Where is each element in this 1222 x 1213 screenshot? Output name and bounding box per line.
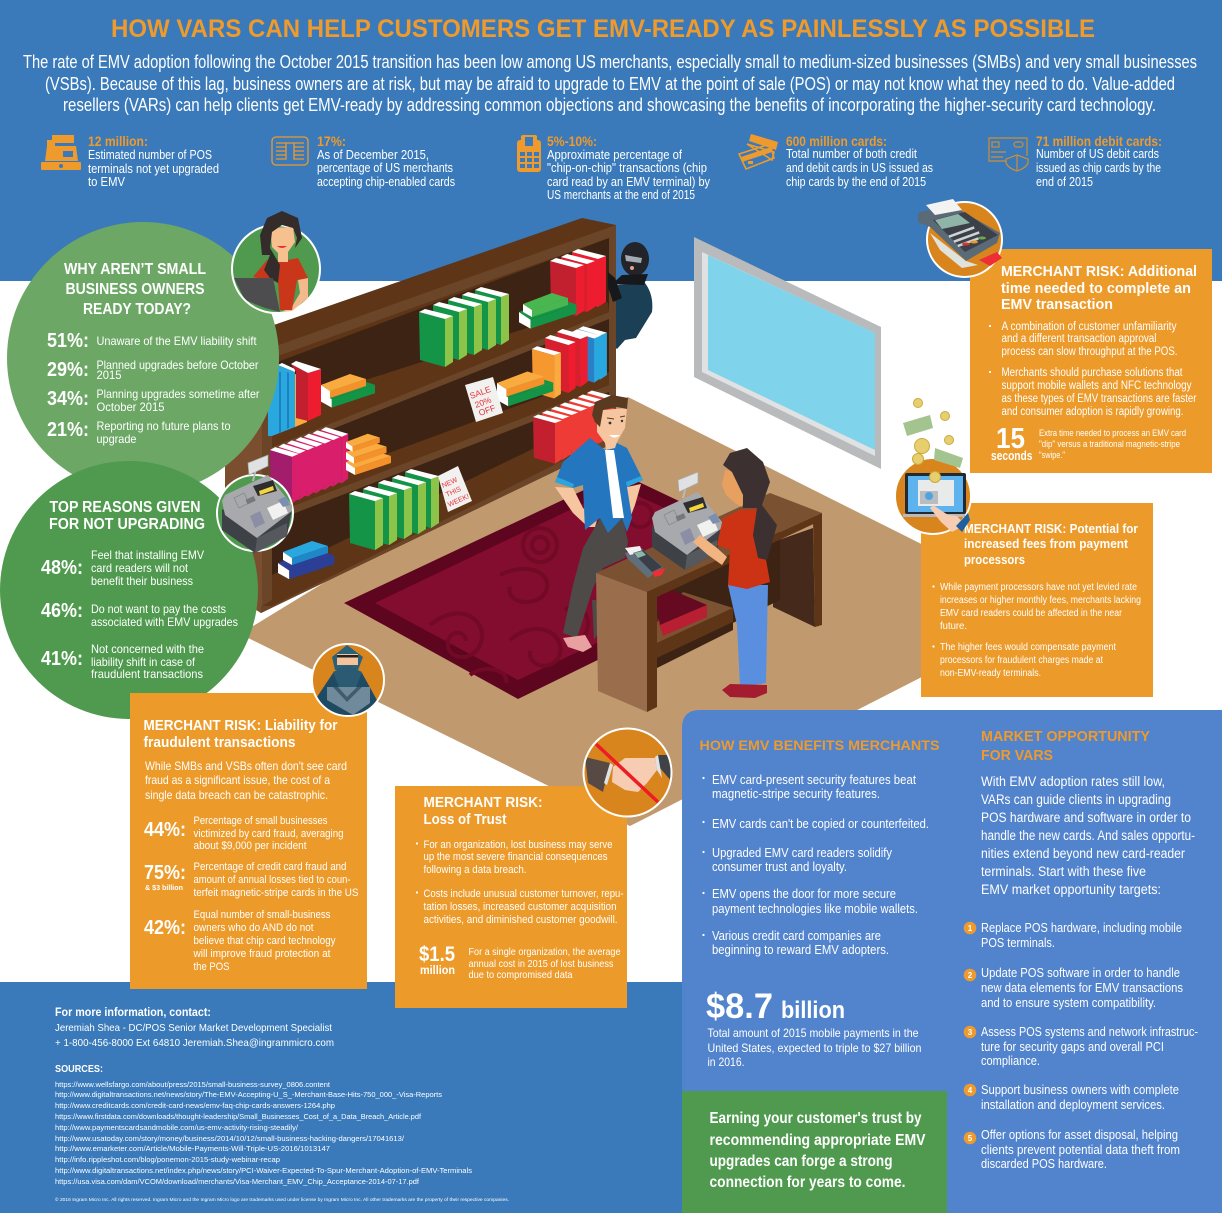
heading: MERCHANT RISK: Liability for [144, 717, 338, 734]
market opportunity intro: EMV market opportunity targets: [981, 882, 1161, 897]
sources list: http://info.rippleshot.com/blog/ponemon-2015-study-webinar-recap [55, 1155, 280, 1164]
circle: why aren't small business owners ready [7, 222, 279, 494]
panel: merchant risk loss of trust [395, 786, 627, 1008]
contact information: For more information, contact: [55, 1007, 211, 1019]
descriptions: Feel that installing EMV [91, 548, 204, 562]
title: HOW VARS CAN HELP CUSTOMERS GET EMV-READY AS PAINLESSLY AS POSSIBLE [111, 15, 1095, 43]
stat description: "dip" versus a traditional magnetic-stripe [1039, 439, 1180, 450]
heading: MERCHANT RISK: Additional [1001, 263, 1197, 280]
man t-shirt [605, 450, 624, 518]
bullet text: While payment processors have not yet levied rate [940, 582, 1137, 593]
descriptions: 2015 [96, 368, 122, 382]
icon: card terminal keypad [517, 135, 541, 172]
icon: hacker [312, 644, 384, 716]
bullets [932, 585, 935, 648]
market opportunity targets: Replace POS hardware, including mobile [981, 921, 1182, 935]
market opportunity targets [981, 921, 1198, 1171]
percentages: 42%: [144, 917, 186, 939]
bullet text: Costs include unusual customer turnover, repu- [424, 888, 624, 900]
woman jeans [728, 585, 768, 687]
illustration: burglar body behind shelf [612, 242, 652, 349]
descriptions: Unaware of the EMV liability shift [96, 334, 257, 348]
stat: $8.7 billion: billion [781, 997, 845, 1024]
woman head [722, 470, 743, 507]
heading: market opportunity for VARs: FOR VARS [981, 747, 1053, 764]
descriptions: fraudulent transactions [91, 667, 203, 681]
stat: 12 million POS terminals: Estimated number of POS [88, 147, 212, 162]
stat description [1039, 428, 1186, 461]
icon: cash register [217, 455, 293, 553]
counter interior [647, 530, 780, 660]
stat: 15 seconds: 15 [996, 423, 1025, 455]
percentages: & $3 billion [145, 883, 183, 892]
descriptions: Do not want to pay the costs [91, 602, 226, 616]
counter top [596, 493, 822, 592]
man legs [563, 518, 628, 638]
market opportunity intro: POS hardware and software in order to [981, 810, 1191, 825]
sources list: http://www.usatoday.com/story/money/business/2014/10/12/small-business-hacking-dangers/17041613/ [55, 1134, 405, 1143]
market opportunity intro: With EMV adoption rates still low, [981, 774, 1165, 789]
stat: 5%-10% chip-on-chip transactions [517, 134, 710, 202]
stat: 5%-10% chip-on-chip transactions: 5%-10%: [547, 134, 597, 149]
stat description: annual cost in 2015 of lost business [468, 958, 614, 970]
stat: 15 seconds [991, 423, 1032, 463]
market opportunity targets: compliance. [981, 1054, 1040, 1068]
market opportunity targets: discarded POS hardware. [981, 1157, 1107, 1171]
illustration: cashier woman [693, 448, 777, 698]
books: middle row flat stack [497, 371, 553, 406]
stat: 71 million debit cards: end of 2015 [1036, 174, 1093, 189]
stat: $1.5 million: $1.5 [419, 943, 455, 966]
benefits list: EMV card-present security features beat [712, 773, 916, 787]
shelf interior [272, 238, 609, 600]
stat: 17% merchants accepting chip cards: 17%: [317, 134, 346, 149]
shelf bottom board [272, 412, 609, 606]
books: bottom row red [533, 390, 614, 464]
stat description: due to compromised data [468, 969, 573, 981]
percentages [47, 330, 89, 441]
percentages: 41%: [41, 648, 83, 670]
panel: merchant risk additional time [970, 249, 1212, 473]
numbered badges: 5 [968, 1134, 973, 1143]
bullet text: For an organization, lost business may serve [424, 839, 612, 851]
bullet text: and consumer adoption is rapidly growing. [1002, 406, 1184, 418]
percentages [144, 819, 186, 939]
heading: WHY AREN’T SMALL [64, 261, 206, 278]
stat: 12 million POS terminals: terminals not yet upgraded [88, 161, 219, 176]
percentages: 44%: [144, 819, 186, 841]
descriptions: liability shift in case of [91, 655, 196, 669]
bullets [416, 842, 418, 894]
stat: 600 million cards: Total number of both credit [786, 146, 917, 161]
heading: market opportunity for VARs: MARKET OPPORTUNITY [981, 728, 1150, 745]
sign: new this week [438, 466, 472, 512]
panel: merchant risk potential fees [921, 503, 1153, 697]
icon: card terminal [918, 199, 1002, 277]
stat: 600 million cards: and debit cards in US issued as [786, 160, 933, 175]
sources list: http://www.paymentscardsandmobile.com/us-emv-activity-rising-steadily/ [55, 1123, 299, 1132]
heading [1001, 263, 1197, 313]
sign: sale 20% off: OFF [477, 403, 497, 418]
stat descriptions: believe that chip card technology [194, 935, 336, 947]
stat description: For a single organization, the average [468, 946, 621, 958]
store floor [240, 397, 1053, 826]
percentages: 34%: [47, 388, 89, 410]
circle: top reasons for not upgrading [0, 461, 258, 719]
stat descriptions: about $9,000 per incident [194, 840, 306, 852]
stat description: United States, expected to triple to $27 billion [708, 1041, 922, 1055]
sign: sale 20% off: 20% [473, 395, 493, 410]
woman's arm [282, 278, 308, 312]
bullet text: A combination of customer unfamiliarity [1002, 321, 1177, 333]
books: left row blue, orange and red [268, 361, 321, 436]
descriptions: Not concerned with the [91, 642, 204, 656]
bullet text: tation losses, increased customer acquisition [424, 901, 616, 913]
panel: merchant risk liability [130, 693, 367, 989]
sources list: http://www.digitaltransactions.net/news/story/The-EMV-Accepting-U_S_-Merchant-Base-Hits-750_000_-Visa-Reports [55, 1090, 442, 1099]
intro text [145, 759, 347, 802]
woman's smile [277, 246, 287, 248]
stat: 5%-10% chip-on-chip transactions: US merchants at the end of 2015 [547, 187, 695, 202]
panel: blue benefits and market opportunity [682, 710, 1222, 1213]
shelf top lip [262, 225, 616, 606]
heading: time needed to complete an [1001, 280, 1191, 297]
market opportunity targets: POS terminals. [981, 936, 1055, 950]
laptop [234, 278, 280, 312]
bullet text: following a data breach. [424, 864, 526, 876]
books: top row flat stack [519, 293, 577, 329]
heading: MERCHANT RISK: [424, 795, 542, 811]
percentages: 75%: [144, 862, 186, 884]
bullet text: up the most severe financial consequences [424, 851, 608, 863]
illustration: bookshelf [225, 218, 616, 613]
stat descriptions: Equal number of small-business [194, 909, 331, 921]
tray [655, 590, 707, 625]
intro text: single data breach can be catastrophic. [145, 788, 328, 802]
contact information: Jeremiah Shea - DC/POS Senior Market Development Specialist [55, 1022, 332, 1034]
woman shoes [722, 684, 767, 698]
market opportunity targets: Update POS software in order to handle [981, 966, 1180, 980]
market opportunity targets: clients prevent potential data theft from [981, 1143, 1180, 1157]
sources list: http://www.creditcards.com/credit-card-news/emv-faq-chip-cards-answers-1264.php [55, 1101, 335, 1110]
stat descriptions: victimized by card fraud, averaging [194, 828, 344, 840]
bills [903, 415, 933, 436]
stat: 17% merchants accepting chip cards: accepting chip-enabled cards [317, 174, 455, 189]
heading: market opportunity for VARs [981, 728, 1150, 764]
coins [912, 398, 954, 482]
heading: fraudulent transactions [144, 734, 296, 751]
woman's neck and face [270, 227, 295, 262]
man head [597, 408, 627, 450]
numbered badges: 1 [968, 924, 973, 933]
bullet text: increases or higher monthly fees, merchants lacking [940, 595, 1141, 606]
descriptions: card readers will not [91, 561, 189, 575]
heading: TOP REASONS GIVEN [50, 499, 200, 516]
shelf frame [225, 218, 616, 613]
market opportunity intro: terminals. Start with these five [981, 864, 1146, 879]
bullet text: and a different transaction approval [1002, 333, 1156, 345]
shelf board 2 [272, 372, 609, 514]
heading: increased fees from payment [964, 537, 1129, 551]
heading: BUSINESS OWNERS [66, 281, 204, 298]
bullet text: Merchants should purchase solutions that [1002, 367, 1183, 379]
descriptions: Planning upgrades sometime after [96, 387, 260, 401]
descriptions: October 2015 [96, 400, 165, 414]
sign: new this week: NEW [441, 477, 459, 490]
stat: 71 million debit cards [989, 134, 1162, 189]
heading: READY TODAY? [83, 301, 191, 318]
stat: 600 million cards [739, 134, 933, 189]
contact information [55, 1007, 334, 1049]
icon: card and shield [989, 138, 1028, 171]
descriptions [91, 548, 238, 681]
illustration: card terminal on counter [625, 546, 665, 578]
woman hair [723, 448, 777, 560]
benefits list: consumer trust and loyalty. [712, 860, 847, 874]
heading [144, 717, 338, 751]
books: pink set [270, 427, 348, 503]
stat: $1.5 million: million [420, 963, 455, 977]
intro paragraph [23, 52, 1197, 115]
callout: earning trust: Earning your customer's trust by [710, 1110, 922, 1127]
market opportunity intro [981, 774, 1195, 897]
percentages: 51%: [47, 330, 89, 352]
benefits list: magnetic-stripe security features. [712, 787, 880, 801]
counter right end panel [773, 528, 815, 627]
market opportunity targets: ture for security gaps and overall PCI [981, 1040, 1164, 1054]
heading: EMV transaction [1001, 296, 1113, 313]
stat: 600 million cards: chip cards by the end of 2015 [786, 174, 926, 189]
stat: $8.7 billion: $8.7 [706, 987, 773, 1026]
illustration: window [694, 237, 881, 469]
sign: new this week: WEEK! [447, 493, 470, 509]
descriptions [96, 334, 260, 446]
bullet text [424, 839, 624, 926]
bullet text: The higher fees would compensate payment [940, 642, 1116, 653]
market opportunity targets: new data elements for EMV transactions [981, 981, 1183, 995]
bullet text: support mobile wallets and NFC technology [1002, 380, 1192, 392]
stat: 71 million debit cards: issued as chip cards by the [1036, 160, 1161, 175]
icon: broken handshake [584, 728, 672, 816]
numbered badges: 3 [968, 1028, 973, 1037]
woman's shirt [253, 258, 308, 310]
books: top row green [419, 287, 509, 367]
stat description: Extra time needed to process an EMV card [1039, 428, 1186, 439]
stat: 17% merchants accepting chip cards: percentage of US merchants [317, 160, 453, 175]
background: top blue band [0, 0, 1222, 281]
market opportunity targets: installation and deployment services. [981, 1098, 1165, 1112]
percentages: 48%: [41, 557, 83, 579]
illustration: customer man [555, 395, 643, 652]
man shoes [563, 635, 592, 652]
market opportunity intro: VARs can guide clients in upgrading [981, 792, 1171, 807]
heading [964, 522, 1138, 567]
stat: 17% merchants accepting chip cards [272, 134, 455, 189]
sources list: https://usa.visa.com/dam/VCOM/download/merchants/Visa-Merchant_EMV_Chip_Acceptance-2014-07-17.pdf [55, 1177, 420, 1186]
benefits list: beginning to reward EMV adopters. [712, 943, 889, 957]
bullet dots [702, 777, 705, 936]
stat: $8.7 billion [706, 987, 845, 1026]
stat description [468, 946, 621, 981]
sources list: http://www.emarketer.com/Article/Mobile-Payments-Will-Triple-US-2016/1013147 [55, 1144, 330, 1153]
callout: earning trust [682, 1091, 947, 1213]
books: bottom left flat stack [278, 541, 334, 579]
market opportunity targets: Offer options for asset disposal, helping [981, 1128, 1178, 1142]
benefits list: payment technologies like mobile wallets. [712, 902, 918, 916]
bullet text [940, 582, 1141, 679]
callout: earning trust: recommending appropriate EMV [710, 1132, 926, 1149]
percentages: 21%: [47, 419, 89, 441]
illustration: rug [344, 473, 700, 699]
background: bottom blue band [0, 982, 1222, 1213]
descriptions: benefit their business [91, 574, 193, 588]
illustration: counter [596, 493, 822, 712]
descriptions: Planned upgrades before October [96, 358, 258, 372]
numbered badges [964, 922, 976, 1144]
man face [607, 416, 625, 438]
woman top [717, 509, 770, 589]
shelf board 1 [272, 302, 609, 447]
bullet text: EMV card readers could be affected in the near [940, 608, 1123, 619]
stat: 12 million POS terminals: 12 million: [88, 134, 148, 149]
sign: sale 20% off: SALE [468, 384, 492, 401]
books: left row flat stack [321, 374, 375, 408]
books: bottom row green [349, 469, 439, 550]
stat: $1.5 million [419, 943, 455, 977]
bullet text [1002, 321, 1197, 418]
sources list: https://www.wellsfargo.com/about/press/2015/small-business-survey_0806.content [55, 1080, 331, 1089]
stat: 71 million debit cards: Number of US debit cards [1036, 146, 1159, 161]
books: top row red [550, 249, 606, 316]
heading: Loss of Trust [424, 812, 507, 828]
icon: chip [272, 137, 308, 165]
bullet text: process can slow throughput at the POS. [1002, 346, 1178, 358]
sources list: SOURCES: [55, 1064, 103, 1075]
descriptions: upgrade [96, 432, 137, 446]
percentages: 29%: [47, 359, 89, 381]
stat: 15 seconds: seconds [991, 448, 1032, 463]
stat descriptions: owners who do AND do not [194, 922, 314, 934]
heading [424, 795, 542, 828]
intro text: fraud as a significant issue, the cost of a [145, 773, 330, 787]
stat descriptions: Percentage of credit card fraud and [194, 861, 346, 873]
stat descriptions: amount of annual losses tied to coun- [194, 874, 351, 886]
books: orange flat stack [346, 434, 391, 475]
stat: 12 million POS terminals [41, 134, 219, 189]
stat: 5%-10% chip-on-chip transactions: Approximate percentage of [547, 147, 682, 162]
percentages: 46%: [41, 600, 83, 622]
heading: MERCHANT RISK: Potential for [964, 522, 1138, 536]
stat: 71 million debit cards: 71 million debit cards: [1036, 134, 1162, 149]
benefits list [712, 773, 929, 957]
callout: earning trust: upgrades can forge a strong [710, 1153, 892, 1170]
stat descriptions: terfeit magnetic-stripe cards in the US [194, 887, 358, 899]
descriptions: Reporting no future plans to [96, 419, 231, 433]
bullet text: non-EMV-ready terminals. [940, 668, 1041, 679]
bullets [989, 325, 991, 373]
stat descriptions: will improve fraud protection at [193, 948, 330, 960]
market opportunity intro: nities extend beyond new card-reader [981, 846, 1185, 861]
books: middle row blue and red [532, 326, 607, 398]
stat: 17% merchants accepting chip cards: As of December 2015, [317, 147, 429, 162]
callout: earning trust: connection for years to come. [710, 1174, 906, 1191]
numbered badges: 4 [968, 1086, 973, 1095]
man shirt [555, 438, 643, 533]
sources list [55, 1064, 472, 1186]
intro text: While SMBs and VSBs often don't see card [145, 759, 347, 773]
stat description: in 2016. [708, 1055, 744, 1069]
woman's hair [260, 211, 302, 283]
icon: register [41, 135, 81, 170]
icon: woman with laptop [232, 211, 320, 313]
market opportunity targets: Support business owners with complete [981, 1083, 1179, 1097]
heading: processors [964, 553, 1025, 567]
copyright: © 2016 Ingram Micro Inc. All rights reserved. Ingram Micro and the Ingram Micro logo are trademarks used under license by Ingram Micro Inc. All other trademarks are the property of their respective companies. [55, 1196, 509, 1203]
icon: money falling onto laptop [895, 398, 971, 534]
descriptions: associated with EMV upgrades [91, 615, 238, 629]
benefits list: EMV cards can't be copied or counterfeited. [712, 817, 929, 831]
stat descriptions: Percentage of small businesses [194, 815, 328, 827]
stat: 600 million cards: 600 million cards: [786, 134, 887, 149]
man hair [592, 395, 628, 427]
numbered badges: 2 [968, 971, 973, 980]
percentages [41, 557, 83, 670]
stat descriptions [193, 815, 358, 973]
heading: FOR NOT UPGRADING [49, 516, 205, 533]
market opportunity targets: and to ensure system compatibility. [981, 996, 1156, 1010]
heading [49, 499, 205, 533]
sources list: http://www.digitaltransactions.net/index.php/news/story/PCI-Waiver-Expected-To-Spur-Merchant-Adoption-of-EMV-Terminals [55, 1166, 472, 1175]
shelf side panel [225, 330, 262, 613]
bullet text: processors for fraudulent charges made at [940, 655, 1103, 666]
stat: 5%-10% chip-on-chip transactions: card read by an EMV terminal) by [547, 174, 710, 189]
man arms [555, 487, 597, 527]
icon: credit cards [739, 134, 778, 169]
benefits list: EMV opens the door for more secure [712, 887, 896, 901]
sources list: https://www.firstdata.com/downloads/thought-leadership/Small_Businesses_Cost_of_a_Data_Breach_Article.pdf [55, 1112, 422, 1121]
bullet text: activities, and diminished customer goodwill. [424, 914, 618, 926]
woman arm [693, 535, 727, 565]
contact information: + 1-800-456-8000 Ext 64810 Jeremiah.Shea@ingrammicro.com [55, 1037, 334, 1049]
sign: sale 20% off [465, 377, 503, 422]
illustration: cash register on counter [652, 472, 722, 570]
sign: new this week: THIS [445, 486, 463, 499]
bullet text: future. [940, 621, 967, 632]
stat: 12 million POS terminals: to EMV [88, 174, 125, 189]
heading: how EMV benefits merchants: HOW EMV BENEFITS MERCHANTS [700, 737, 940, 753]
stat description [708, 1026, 922, 1069]
market opportunity intro: handle the new cards. And sales opportu- [981, 828, 1195, 843]
stat description: Total amount of 2015 mobile payments in the [708, 1026, 919, 1040]
counter pillar [596, 573, 647, 712]
stat descriptions: the POS [194, 961, 230, 973]
stat description: "swipe." [1039, 450, 1065, 461]
stat: 5%-10% chip-on-chip transactions: "chip-on-chip" transactions (chip [547, 160, 707, 175]
benefits list: Various credit card companies are [712, 929, 881, 943]
benefits list: Upgraded EMV card readers solidify [712, 846, 893, 860]
heading [64, 261, 206, 318]
counter lower shelf [657, 592, 733, 643]
burglar glove on shelf [608, 272, 622, 302]
